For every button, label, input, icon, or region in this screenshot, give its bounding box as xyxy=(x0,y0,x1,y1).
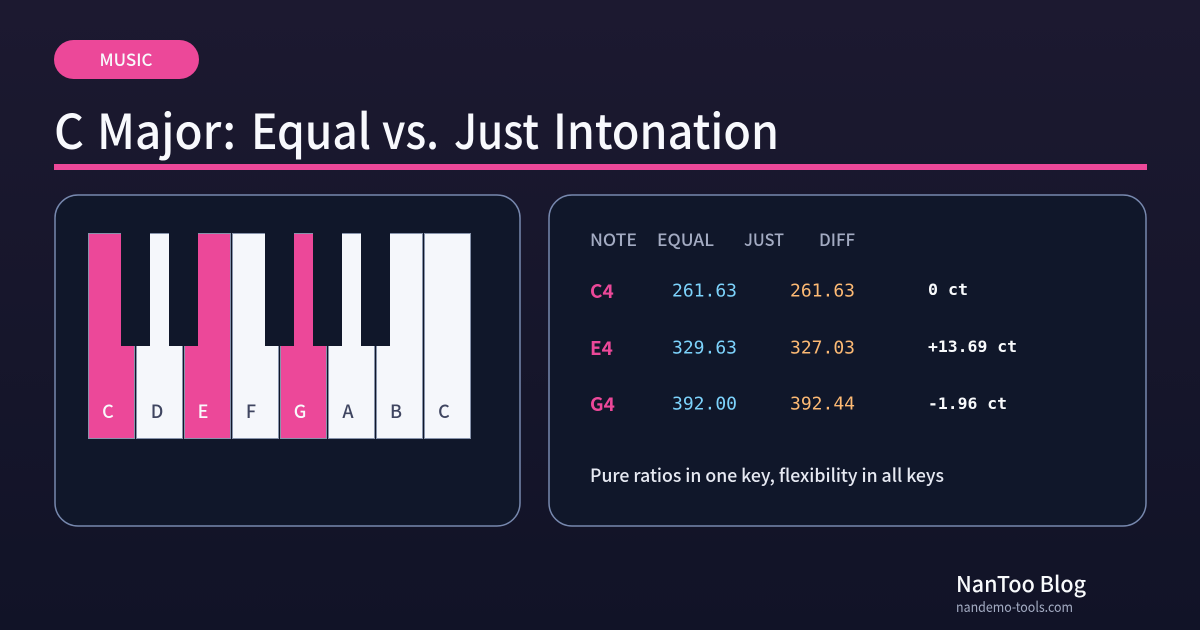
title xyxy=(54,93,779,163)
row: G4: 392.00 xyxy=(672,394,737,414)
title: Intonation xyxy=(553,93,779,163)
panel: piano keyboard xyxy=(55,195,520,526)
key labels: A xyxy=(342,398,354,424)
panel: frequency table xyxy=(549,195,1146,526)
key labels: E xyxy=(198,398,208,424)
table header: NOTE xyxy=(590,226,637,251)
key labels: C xyxy=(438,398,450,424)
title: vs. xyxy=(382,93,439,163)
category badge: MUSIC xyxy=(100,46,153,71)
table header xyxy=(590,226,855,251)
row: E4: E4 xyxy=(590,334,613,361)
row: G4: -1.96 ct xyxy=(928,394,1007,413)
title: Equal xyxy=(251,93,371,163)
row: C4: C4 xyxy=(590,277,614,304)
key labels xyxy=(102,398,450,424)
footer brand: nandemo-tools.com xyxy=(956,597,1073,617)
title: C xyxy=(54,93,84,163)
row: E4: 327.03 xyxy=(790,338,855,358)
row: E4: +13.69 ct xyxy=(928,337,1017,356)
table note: Pure ratios in one key, flexibility in all keys xyxy=(590,462,944,488)
table header: EQUAL xyxy=(657,226,714,251)
key labels: G xyxy=(294,398,306,424)
key labels: F xyxy=(246,398,256,424)
row: G4: 392.44 xyxy=(790,394,855,414)
table header: JUST xyxy=(744,226,784,251)
key labels: D xyxy=(151,398,163,424)
row: C4: 261.63 xyxy=(672,280,737,302)
row: G4 xyxy=(590,390,1007,417)
row: G4: G4 xyxy=(590,390,615,417)
row: E4: 329.63 xyxy=(672,338,737,358)
row: C4: 0 ct xyxy=(928,280,968,299)
white keys xyxy=(88,234,470,438)
row: C4 xyxy=(590,277,968,304)
key labels: C xyxy=(102,398,114,424)
row: C4: 261.63 xyxy=(790,280,855,302)
row: E4 xyxy=(590,334,1017,361)
footer brand: NanToo Blog xyxy=(956,567,1086,599)
title: Major: xyxy=(97,93,236,163)
title underline xyxy=(54,164,1147,170)
title: Just xyxy=(454,93,539,163)
key labels: B xyxy=(390,398,402,424)
category badge xyxy=(54,40,199,79)
footer brand xyxy=(956,567,1086,617)
table header: DIFF xyxy=(819,226,855,251)
black keys xyxy=(121,233,390,346)
